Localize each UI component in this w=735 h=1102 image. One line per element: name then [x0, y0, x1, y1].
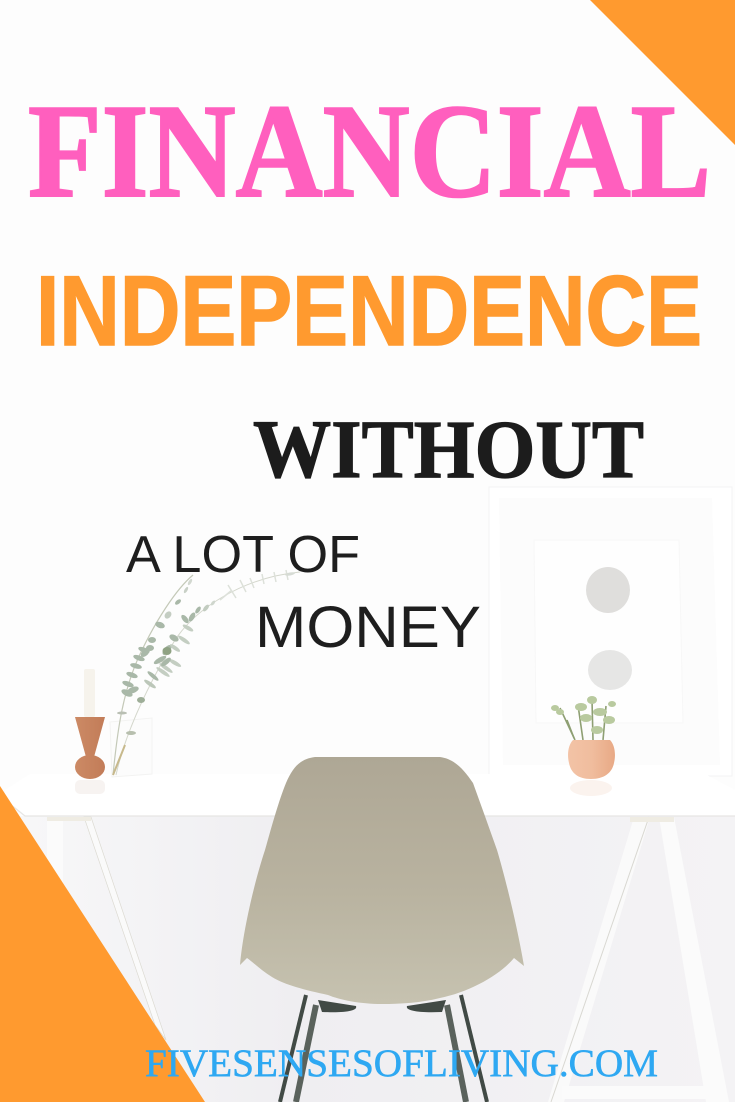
- chair seat: [240, 757, 524, 1004]
- art dot: upper: [586, 567, 630, 613]
- table legs: [47, 817, 729, 1102]
- orange corner: top right: [590, 0, 735, 145]
- website url: FIVESENSESOFLIVING.COM: [145, 1042, 658, 1085]
- subtitle: a lot of: A LOT OF: [126, 526, 360, 584]
- chair bracket: right: [407, 1000, 446, 1012]
- wooden candle holder: [75, 717, 105, 779]
- eucalyptus branches: [113, 570, 300, 775]
- chair legs: [280, 995, 487, 1102]
- orange corner: bottom left: [0, 786, 205, 1102]
- title: without: WITHOUT: [253, 403, 644, 495]
- plant stems: [560, 700, 606, 740]
- glass vase: [110, 718, 152, 777]
- desk top: [5, 774, 735, 816]
- plant leaves: [551, 696, 616, 734]
- desk reflection: holder: [75, 780, 105, 794]
- desk reflection: pot: [570, 780, 612, 796]
- art dot: lower: [588, 650, 632, 690]
- copper pot: [568, 740, 615, 779]
- chair bracket: left: [318, 1000, 356, 1012]
- subtitle: money: MONEY: [255, 595, 481, 660]
- picture frame: [489, 487, 732, 776]
- candle: [84, 669, 95, 717]
- potted plant: [551, 696, 616, 779]
